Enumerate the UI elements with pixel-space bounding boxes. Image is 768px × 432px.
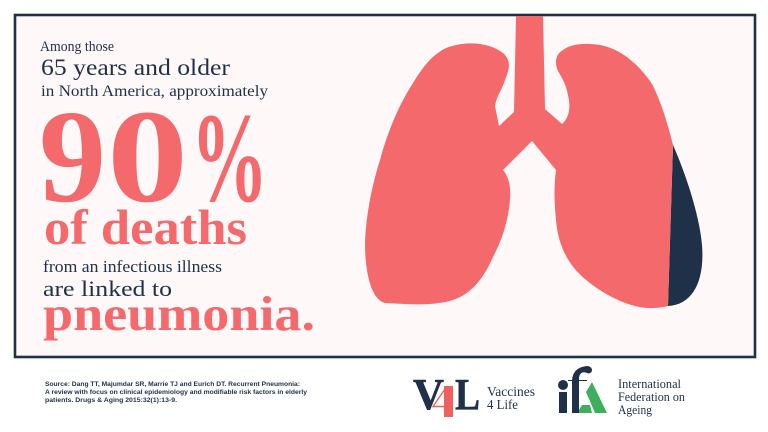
panel: main framed panel bbox=[15, 15, 755, 357]
text: source citation: patients. Drugs & Aging 2015:32(1):13-9. bbox=[45, 397, 177, 404]
logo mark 4 bbox=[433, 386, 453, 416]
text: intro line two: 65 years and older bbox=[41, 55, 230, 81]
logo mark f bbox=[568, 366, 592, 413]
logo: International Federation on Ageing bbox=[558, 366, 686, 417]
text: are linked to: are linked to bbox=[43, 276, 172, 301]
logo: Vaccines 4 Life: 4 Life bbox=[487, 398, 518, 413]
text: big statistic 90%: 0 bbox=[107, 82, 188, 230]
text: intro line three: in North America, approximately bbox=[41, 83, 268, 100]
logo: International Federation on Ageing: Ageing bbox=[618, 403, 653, 417]
text: intro line one: Among those bbox=[40, 39, 114, 55]
text: big statistic 90% bbox=[39, 82, 268, 230]
text: source citation: A review with focus on clinical epidemiology and modifiable risk factors in elderly bbox=[45, 389, 308, 396]
chart: lungs illustration bbox=[365, 16, 702, 308]
text: big statistic 90%: 9 bbox=[39, 82, 106, 230]
text: source citation: Source: Dang TT, Majumdar SR, Marrie TJ and Eurich DT. Recurrent Pneumonia: bbox=[45, 381, 300, 388]
logo mark A bbox=[577, 382, 607, 413]
text: pneumonia: pneumonia. bbox=[43, 286, 315, 341]
logo mark L: L bbox=[455, 370, 480, 419]
text: from an infectious illness: from an infectious illness bbox=[43, 257, 222, 276]
logo mark i bbox=[558, 380, 568, 390]
dark shaded lung base bbox=[668, 145, 702, 306]
coral lungs and trachea bbox=[365, 16, 673, 308]
text: big statistic 90%: % bbox=[191, 87, 268, 229]
logo: International Federation on Ageing: Federation on bbox=[618, 390, 686, 404]
text: of deaths: of deaths bbox=[44, 199, 247, 255]
logo mark V: V bbox=[413, 370, 444, 419]
logo text: Vaccines bbox=[487, 385, 535, 400]
text: source citation bbox=[45, 381, 308, 404]
logo text: International bbox=[618, 377, 682, 391]
logo: Vaccines 4 Life bbox=[413, 370, 535, 419]
